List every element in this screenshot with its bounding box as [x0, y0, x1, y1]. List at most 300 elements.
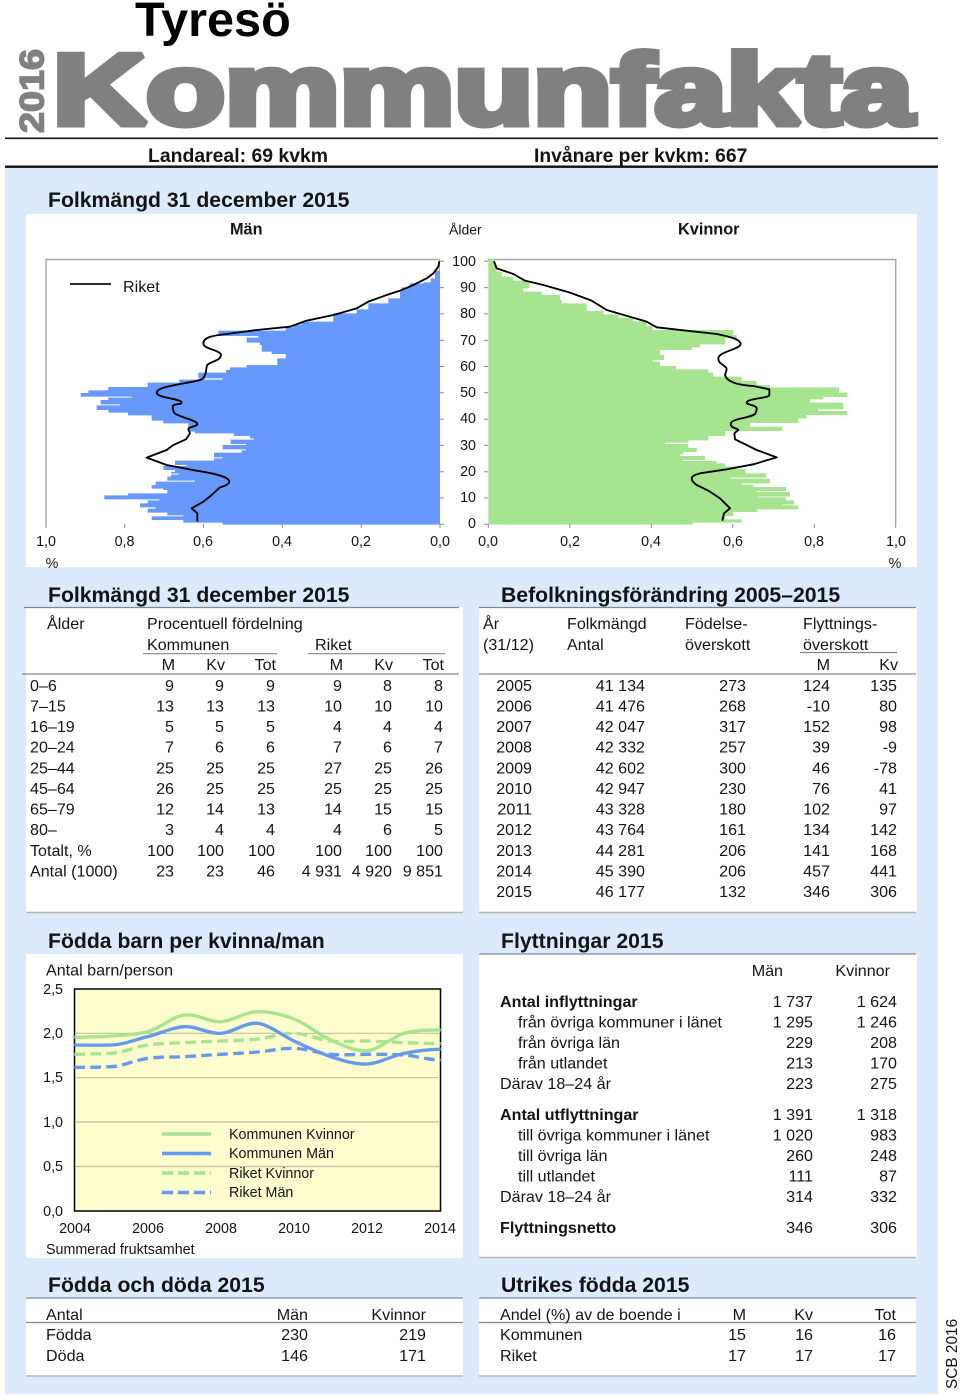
table rows: 206	[719, 862, 746, 880]
table rows: 25	[324, 780, 342, 798]
table rows: 25	[206, 760, 224, 778]
table rows: 441	[870, 862, 897, 880]
table rows: 4	[215, 821, 224, 839]
table header: Kv	[794, 1306, 813, 1324]
table rows: 2012	[496, 821, 532, 839]
table rows: 2014	[496, 862, 532, 880]
x axis labels: 2010	[278, 1221, 310, 1237]
table rows: 42 947	[596, 780, 645, 798]
table rows: 17	[795, 1347, 813, 1365]
age axis labels: 10	[460, 490, 476, 506]
label: women: Kvinnor	[678, 220, 740, 238]
table rows: 5	[165, 718, 174, 736]
panel: population pyramid	[26, 214, 917, 572]
table rows: 135	[870, 677, 897, 695]
x axis labels women: 1,0	[886, 534, 906, 550]
table header: Män	[277, 1306, 308, 1324]
x axis labels women: 0,4	[641, 534, 661, 550]
table rows: 5	[215, 718, 224, 736]
table rows: 2011	[497, 800, 532, 818]
inflows: från utlandet	[518, 1054, 608, 1072]
net migration	[500, 1219, 897, 1237]
table header: Män	[752, 962, 783, 980]
table header: Antal	[46, 1306, 83, 1324]
line: Kommunen Kvinnor	[74, 1012, 441, 1051]
table rows: 168	[870, 842, 897, 860]
inflows: 208	[870, 1034, 897, 1052]
outflows: 1 391	[773, 1106, 813, 1124]
age axis labels: 0	[468, 516, 476, 532]
table rows: 45–64	[30, 780, 75, 798]
table rows: 15	[425, 800, 443, 818]
table rows: -10	[807, 698, 830, 716]
line: Riket women	[494, 261, 777, 521]
panel: births and deaths table	[26, 1298, 463, 1376]
table rows: 41 476	[596, 698, 645, 716]
fertility lines	[74, 1012, 441, 1067]
y axis labels: 1,5	[43, 1070, 63, 1086]
table rows: 219	[399, 1326, 426, 1344]
table header: Kv	[206, 656, 225, 674]
outflows: 260	[786, 1147, 813, 1165]
x axis labels women: 0,6	[723, 534, 743, 550]
heading: migration: Flyttningar 2015	[501, 930, 664, 953]
table header	[46, 1306, 427, 1324]
outflows: Därav 18–24 år	[500, 1188, 612, 1206]
table rows: 5	[434, 821, 443, 839]
table rows: 25	[156, 760, 174, 778]
table header: Tot	[423, 656, 445, 674]
table rows: 230	[281, 1326, 308, 1344]
outflows	[500, 1106, 897, 1206]
table rows: 6	[383, 738, 392, 756]
table rows: 27	[324, 760, 342, 778]
table rows: 23	[206, 862, 224, 880]
table rows: 2010	[496, 780, 532, 798]
table rows: 9 851	[403, 862, 443, 880]
table rows: 10	[425, 698, 443, 716]
table rows	[30, 677, 443, 880]
legend: Riket	[70, 278, 160, 296]
table header: M	[162, 656, 175, 674]
age axis labels	[452, 254, 476, 532]
outflows: 1 020	[773, 1126, 813, 1144]
table rows: 152	[803, 718, 830, 736]
table rows: Totalt, %	[30, 842, 92, 860]
outflows: 87	[879, 1168, 897, 1186]
line: Riket men	[147, 261, 439, 522]
chart frame women	[488, 260, 896, 524]
age axis labels: 90	[460, 280, 476, 296]
chart frame men	[46, 260, 440, 524]
table header	[752, 962, 891, 980]
table rows: 4	[333, 821, 342, 839]
outflows: 314	[786, 1188, 813, 1206]
y axis labels: 0,5	[43, 1159, 63, 1175]
table header: Födelse-	[685, 615, 748, 633]
table rows: 41 134	[596, 677, 645, 695]
table rows: 5	[266, 718, 275, 736]
heading: population pyramid: Folkmängd 31 december 2015	[48, 189, 350, 212]
table header: överskott	[685, 636, 751, 654]
table rows: 42 332	[596, 738, 645, 756]
age axis labels: 20	[460, 464, 476, 480]
table rows: 2013	[496, 842, 532, 860]
table rows: 257	[719, 738, 746, 756]
table rows: 25	[206, 780, 224, 798]
x axis labels: 2004	[59, 1221, 91, 1237]
percent unit left: %	[46, 556, 59, 572]
inflows: Antal inflyttningar	[500, 993, 638, 1011]
table header: Kvinnor	[371, 1306, 427, 1324]
table rows: 100	[147, 842, 174, 860]
table header	[47, 614, 445, 674]
legend: Kommunen Män	[229, 1146, 334, 1162]
table rows: 76	[812, 780, 830, 798]
x axis labels women: 0,8	[804, 534, 824, 550]
table rows	[496, 677, 897, 901]
table header: Tot	[875, 1306, 897, 1324]
outflows: 332	[870, 1188, 897, 1206]
table header: överskott	[803, 636, 869, 654]
table rows: 4	[266, 821, 275, 839]
net migration: 306	[870, 1219, 897, 1237]
table rows: 44 281	[596, 842, 645, 860]
y axis labels	[43, 982, 63, 1220]
table rows: 142	[870, 821, 897, 839]
table rows: 17	[878, 1347, 896, 1365]
outflows: 983	[870, 1126, 897, 1144]
label: men: Män	[230, 220, 263, 238]
outflows: 1 318	[857, 1106, 897, 1124]
x axis labels men: 0,2	[351, 534, 371, 550]
table header: Folkmängd	[567, 615, 647, 633]
x axis labels: 2014	[424, 1221, 456, 1237]
x axis labels: 2006	[132, 1221, 164, 1237]
panel: age distribution table	[22, 607, 463, 912]
table header: Kommunen	[147, 636, 229, 654]
table rows	[46, 1326, 426, 1365]
table rows: 2006	[496, 698, 532, 716]
line: Kommunen Män	[74, 1023, 441, 1064]
panel: foreign born table	[479, 1298, 916, 1376]
table rows: Riket	[500, 1347, 537, 1365]
table rows: 39	[812, 738, 830, 756]
table rows: 25	[374, 780, 392, 798]
panel: fertility chart	[26, 954, 463, 1258]
table rows: Antal (1000)	[30, 862, 118, 880]
age axis labels: 100	[452, 254, 476, 270]
table rows: 2009	[496, 760, 532, 778]
table header: Kv	[879, 656, 898, 674]
panel: population change table	[479, 607, 917, 912]
x axis labels men	[36, 534, 450, 550]
table rows: 43 764	[596, 821, 645, 839]
table rows: 7–15	[30, 698, 66, 716]
table rows: 8	[383, 677, 392, 695]
table rows: 230	[719, 780, 746, 798]
inflows: 275	[870, 1075, 897, 1093]
table rows: 7	[434, 738, 443, 756]
table rows: 20–24	[30, 738, 75, 756]
table rows: 4 931	[302, 862, 342, 880]
legend: Riket: Riket	[123, 278, 160, 296]
table header: (31/12)	[483, 636, 534, 654]
inflows: 223	[786, 1075, 813, 1093]
land area: Landareal: 69 kvkm	[148, 145, 328, 167]
heading: births and deaths: Födda och döda 2015	[48, 1274, 265, 1297]
x axis labels men: 0,8	[115, 534, 134, 550]
legend	[162, 1127, 355, 1201]
inflows: Därav 18–24 år	[500, 1075, 612, 1093]
table rows: 124	[803, 677, 830, 695]
table header: År	[483, 614, 500, 633]
x axis labels men: 1,0	[36, 534, 56, 550]
table header: Riket	[315, 636, 352, 654]
table header: Ålder	[47, 614, 85, 633]
table rows: 268	[719, 698, 746, 716]
age axis labels: 30	[460, 438, 476, 454]
inflows: 1 737	[773, 993, 813, 1011]
table rows: 16	[795, 1326, 813, 1344]
table rows: 6	[383, 821, 392, 839]
table rows: 9	[215, 677, 224, 695]
legend: Riket Män	[229, 1185, 293, 1201]
table rows: 171	[399, 1347, 426, 1365]
footnote: Summerad fruktsamhet	[46, 1242, 195, 1258]
table rows: 65–79	[30, 800, 75, 818]
net migration: 346	[786, 1219, 813, 1237]
table rows: 141	[803, 842, 830, 860]
table rows: 102	[803, 800, 830, 818]
age axis labels: 60	[460, 359, 476, 375]
table rows: 43 328	[596, 800, 645, 818]
table rows: 80	[879, 698, 897, 716]
table rows: 6	[215, 738, 224, 756]
table rows: 146	[281, 1347, 308, 1365]
table rows: 206	[719, 842, 746, 860]
table rows: 2007	[496, 718, 532, 736]
x axis labels men: 0,0	[430, 534, 450, 550]
x axis labels: 2008	[205, 1221, 237, 1237]
table header: M	[733, 1306, 746, 1324]
table rows: 9	[266, 677, 275, 695]
bars: women by age	[488, 259, 847, 525]
table rows	[500, 1326, 896, 1365]
table rows: Kommunen	[500, 1326, 582, 1344]
table rows: 132	[719, 883, 746, 901]
outflows: till övriga kommuner i länet	[518, 1126, 710, 1144]
table rows: 6	[266, 738, 275, 756]
inflows: 229	[786, 1034, 813, 1052]
table rows: Födda	[46, 1326, 92, 1344]
table rows: 80–	[30, 821, 57, 839]
header rule	[5, 138, 938, 139]
inflows: 1 295	[773, 1014, 813, 1032]
plot area	[74, 989, 440, 1211]
outflows: till övriga län	[518, 1147, 607, 1165]
table rows: 13	[257, 698, 275, 716]
table rows: 4 920	[352, 862, 392, 880]
table rows: 25	[257, 760, 275, 778]
outflows: 111	[789, 1168, 813, 1186]
table rows: 26	[425, 760, 443, 778]
table rows: 0–6	[30, 677, 57, 695]
table rows: 13	[156, 698, 174, 716]
outflows: 248	[870, 1147, 897, 1165]
table rows: -78	[874, 760, 897, 778]
table header: Antal	[567, 636, 604, 654]
table rows: 317	[719, 718, 746, 736]
header rule thick	[5, 166, 938, 168]
table rows: 180	[719, 800, 746, 818]
table rows: 14	[324, 800, 342, 818]
table rows: 13	[206, 698, 224, 716]
table rows: 15	[728, 1326, 746, 1344]
table rows: 100	[365, 842, 392, 860]
table rows: 17	[728, 1347, 746, 1365]
table rows: 7	[165, 738, 174, 756]
y axis labels: 0,0	[43, 1204, 63, 1220]
table rows: 98	[879, 718, 897, 736]
table rows: 306	[870, 883, 897, 901]
age axis labels: 70	[460, 333, 476, 349]
table rows: 4	[434, 718, 443, 736]
legend: Kommunen Kvinnor	[229, 1127, 355, 1143]
table rows: 273	[719, 677, 746, 695]
table rows: 2005	[496, 677, 532, 695]
table header: Flyttnings-	[803, 615, 877, 633]
table rows: 346	[803, 883, 830, 901]
heading: fertility: Födda barn per kvinna/man	[48, 930, 325, 953]
x axis labels men: 0,4	[272, 534, 292, 550]
table rows: 134	[803, 821, 830, 839]
table rows: 12	[156, 800, 174, 818]
label: age: Ålder	[449, 222, 482, 238]
table rows: 2015	[496, 883, 532, 901]
table header: Kv	[374, 656, 393, 674]
table header: Kvinnor	[835, 962, 891, 980]
table rows: 100	[315, 842, 342, 860]
table rows: 9	[165, 677, 174, 695]
table rows: 97	[879, 800, 897, 818]
age axis labels: 50	[460, 385, 476, 401]
table rows: 4	[383, 718, 392, 736]
y axis labels: 1,0	[43, 1115, 63, 1131]
table rows: 13	[257, 800, 275, 818]
table rows: 300	[719, 760, 746, 778]
table rows: Döda	[46, 1347, 85, 1365]
table rows: 100	[248, 842, 275, 860]
table header	[483, 614, 898, 674]
table rows: 457	[803, 862, 830, 880]
heading: age distribution: Folkmängd 31 december 2015	[48, 584, 350, 607]
net migration: Flyttningsnetto	[500, 1219, 616, 1237]
bars: men by age	[81, 260, 440, 525]
table rows: 16–19	[30, 718, 75, 736]
table rows: 15	[374, 800, 392, 818]
outflows: Antal utflyttningar	[500, 1106, 639, 1124]
inhabitants per km2: Invånare per kvkm: 667	[534, 144, 747, 167]
table rows: 100	[416, 842, 443, 860]
inflows	[500, 993, 897, 1093]
y axis labels: 2,5	[43, 982, 63, 998]
x axis labels men: 0,6	[193, 534, 213, 550]
table rows: 25–44	[30, 760, 75, 778]
table rows: 25	[257, 780, 275, 798]
heading: population change: Befolkningsförändring 2005–2015	[501, 584, 840, 607]
table rows: 25	[374, 760, 392, 778]
line: Riket Kvinnor	[74, 1033, 441, 1054]
inflows: 1 624	[857, 993, 897, 1011]
table rows: 14	[206, 800, 224, 818]
line: Riket Män	[74, 1048, 441, 1067]
table rows: 9	[333, 677, 342, 695]
y axis title: Antal barn/person	[46, 962, 173, 980]
age axis labels: 80	[460, 306, 476, 322]
inflows: från övriga län	[518, 1034, 620, 1052]
inflows: 1 246	[857, 1014, 897, 1032]
table header: Tot	[255, 656, 277, 674]
legend: Riket Kvinnor	[229, 1166, 314, 1182]
x axis labels	[59, 1221, 456, 1237]
table rows: 46	[257, 862, 275, 880]
heading: foreign born: Utrikes födda 2015	[501, 1274, 690, 1297]
y axis labels: 2,0	[43, 1026, 63, 1042]
table rows: 46	[812, 760, 830, 778]
x axis labels: 2012	[351, 1221, 383, 1237]
table rows: 8	[434, 677, 443, 695]
table rows: 3	[165, 821, 174, 839]
inflows: från övriga kommuner i länet	[518, 1014, 722, 1032]
table header: M	[817, 656, 830, 674]
table rows: 42 047	[596, 718, 645, 736]
table rows: 100	[197, 842, 224, 860]
table rows: 4	[333, 718, 342, 736]
table header	[500, 1306, 897, 1324]
x axis labels women: 0,2	[560, 534, 580, 550]
table rows: 45 390	[596, 862, 645, 880]
table rows: 10	[374, 698, 392, 716]
table rows: 42 602	[596, 760, 645, 778]
table rows: 26	[156, 780, 174, 798]
table header: Procentuell fördelning	[147, 615, 303, 633]
inflows: 170	[870, 1054, 897, 1072]
x axis labels women	[478, 534, 906, 550]
panel: migration table	[479, 954, 917, 1258]
table rows: 46 177	[596, 883, 645, 901]
logo: year 2016: 2016	[14, 49, 52, 133]
table header: M	[330, 656, 343, 674]
x axis labels women: 0,0	[478, 534, 498, 550]
table rows: 2008	[496, 738, 532, 756]
axis ticks	[46, 261, 896, 528]
table header: Andel (%) av de boende i	[500, 1306, 681, 1324]
logo: Kommunfakta wordmark: Kommunfakta	[53, 34, 915, 146]
table rows: 7	[333, 738, 342, 756]
inflows: 213	[786, 1054, 813, 1072]
table rows: 23	[156, 862, 174, 880]
table rows: 161	[719, 821, 746, 839]
gridlines	[75, 1033, 440, 1166]
age axis labels: 40	[460, 411, 476, 427]
outflows: till utlandet	[518, 1168, 595, 1186]
table rows: 25	[425, 780, 443, 798]
percent unit right: %	[889, 556, 902, 572]
table rows: 10	[324, 698, 342, 716]
table rows: 16	[878, 1326, 896, 1344]
table rows: 41	[879, 780, 897, 798]
